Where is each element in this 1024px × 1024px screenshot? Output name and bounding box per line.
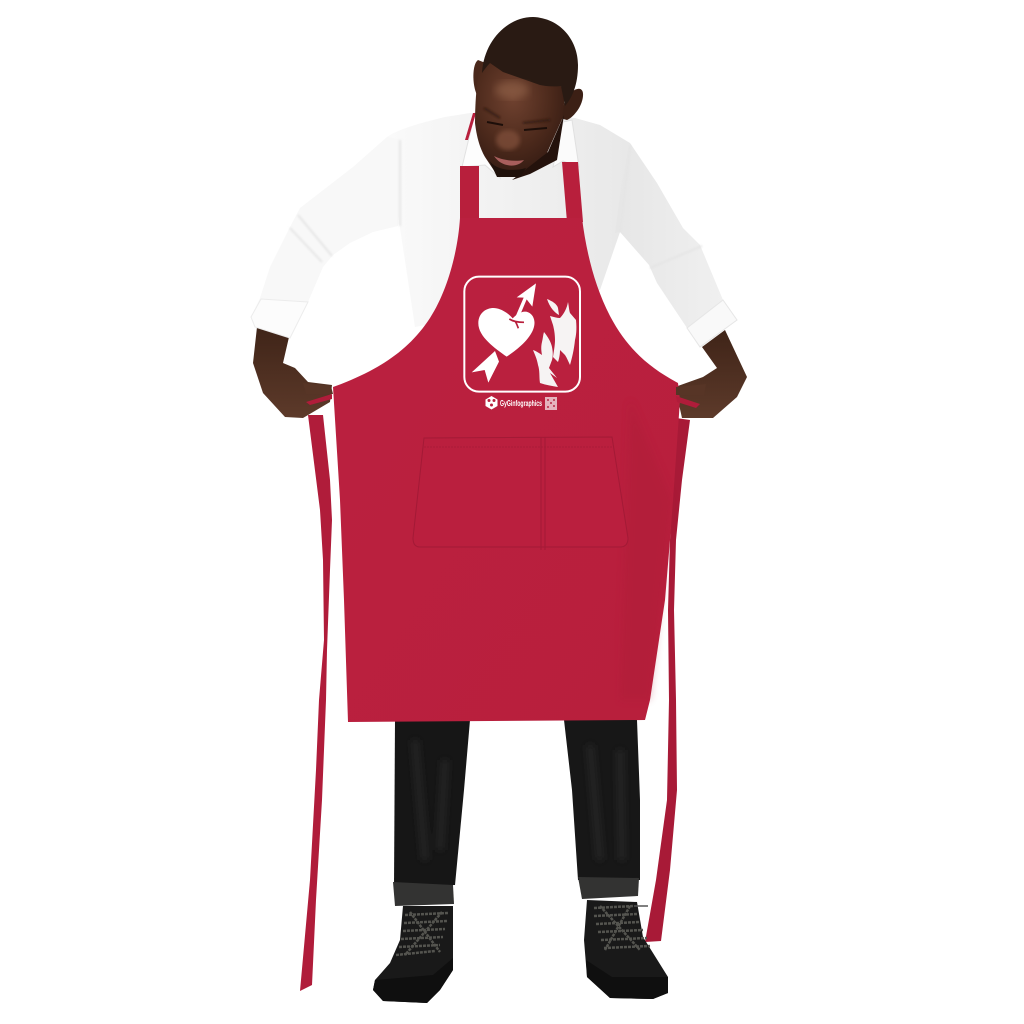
nose	[496, 130, 520, 150]
eyes	[487, 122, 547, 130]
qr code	[545, 397, 557, 410]
logo icon	[486, 396, 498, 410]
left apron tie	[300, 415, 332, 991]
apron logo	[464, 277, 580, 392]
heart pierced by arrow	[472, 283, 536, 383]
right rolled cuff	[687, 300, 737, 347]
left collar	[462, 113, 500, 178]
right tie loop in hand	[676, 396, 700, 408]
right thumb	[676, 384, 706, 396]
forehead highlight	[495, 81, 529, 99]
right leg	[564, 720, 640, 880]
left cuff	[393, 882, 454, 906]
rounded frame	[464, 277, 580, 392]
left shoe	[373, 906, 453, 1003]
left neck strap	[460, 166, 479, 222]
sleeve folds	[290, 140, 702, 268]
neck shadow	[512, 115, 564, 180]
beard	[489, 160, 526, 177]
apron	[333, 162, 680, 722]
right forearm and hand	[675, 330, 747, 418]
thin neck strap	[465, 113, 476, 140]
left forearm and hand	[253, 327, 332, 418]
trouser folds	[415, 740, 622, 860]
right apron tie	[645, 418, 690, 942]
left sleeve	[251, 137, 402, 338]
shirt	[251, 113, 737, 347]
brand logo row	[486, 396, 557, 410]
left leg	[394, 720, 470, 886]
right collar	[553, 120, 579, 167]
face	[475, 60, 565, 177]
brand name: GyGinfographics	[500, 399, 542, 408]
left rolled cuff	[251, 299, 308, 338]
left ear	[473, 60, 483, 95]
right shoe	[584, 900, 668, 999]
head	[473, 17, 583, 180]
flames	[533, 299, 576, 387]
right neck strap	[562, 162, 583, 222]
eyebrows	[484, 108, 550, 123]
right ear	[560, 89, 583, 120]
right cuff	[578, 877, 639, 899]
right sleeve	[615, 143, 737, 347]
hair	[482, 17, 578, 106]
fabric shading	[620, 400, 672, 700]
apron body	[333, 218, 680, 722]
pocket	[413, 437, 628, 550]
torso	[387, 113, 630, 327]
left thumb	[303, 383, 333, 394]
mouth	[494, 156, 524, 166]
left tie loop in hand	[306, 394, 332, 405]
trousers	[393, 720, 640, 906]
